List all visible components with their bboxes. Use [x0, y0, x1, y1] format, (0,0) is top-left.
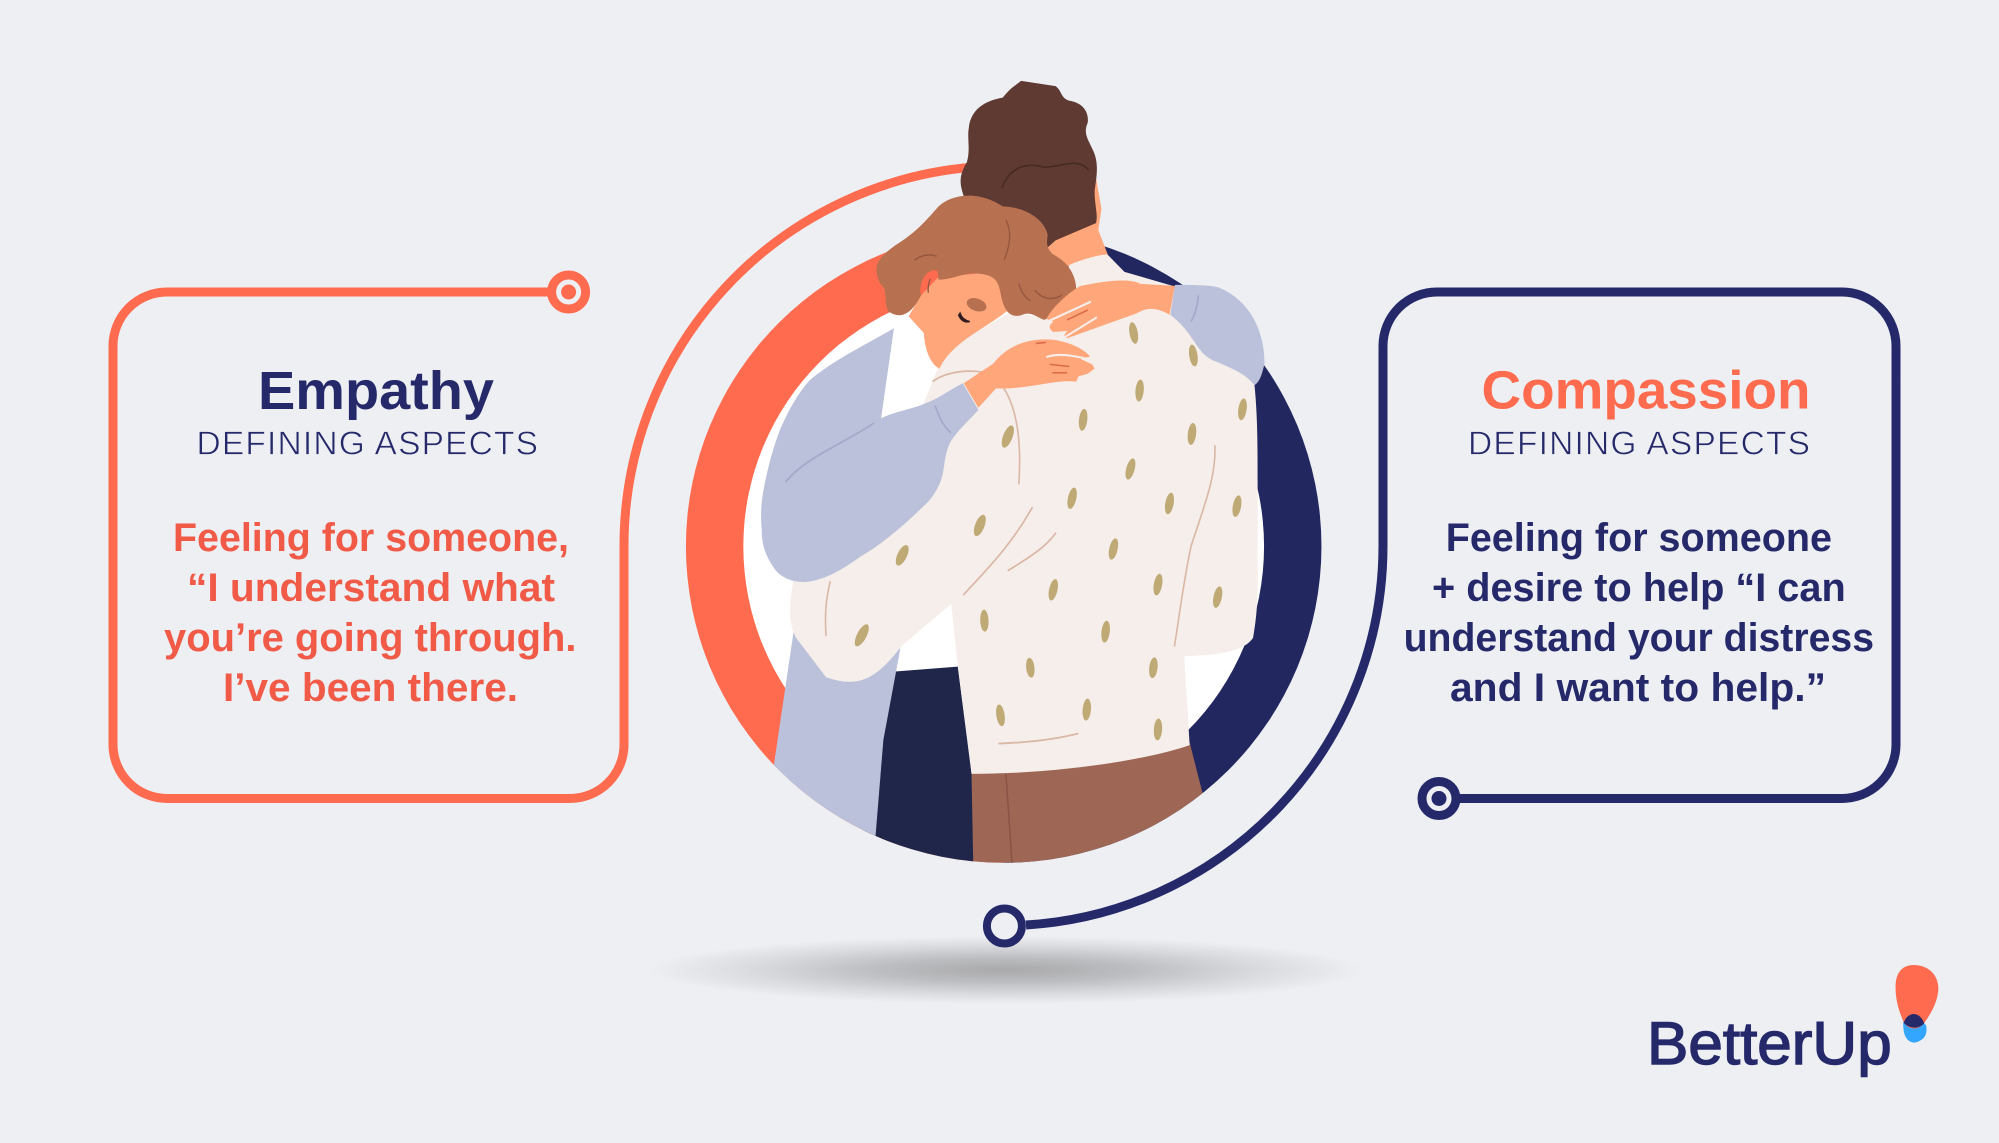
heading: empathy: Empathy: [258, 361, 494, 421]
panel: empathy outline with connector arc: [113, 167, 975, 798]
subheading: compassion: DEFINING ASPECTS: [1468, 426, 1810, 463]
text block: empathy definition: [164, 516, 576, 710]
icon: coral node: [552, 275, 586, 309]
ring: navy half: [1004, 230, 1321, 863]
icon: navy arc end ring: [987, 908, 1022, 944]
back figure: neck: [1040, 170, 1108, 267]
logo: BetterUp: [1647, 965, 1938, 1077]
woman: right sleeve on man's shoulder: [1170, 285, 1265, 385]
icon: logo droplets: [1896, 965, 1938, 1043]
text block: empathy definition: I’ve been there.: [223, 666, 518, 710]
woman: shirt patch: [881, 322, 941, 421]
text block: empathy definition: you’re going through.: [164, 616, 576, 660]
text block: empathy definition: “I understand what: [187, 566, 555, 610]
icon: navy node: [1422, 782, 1456, 816]
text block: compassion definition: + desire to help “I can: [1432, 566, 1846, 610]
ring interior: [743, 286, 1264, 807]
woman: coat sleeve: [761, 328, 978, 582]
woman: pants: [863, 666, 974, 862]
back figure: hair: [961, 81, 1097, 259]
text block: compassion definition: and I want to help.”: [1450, 666, 1826, 710]
woman: hair: [876, 196, 1076, 320]
subheading: empathy: DEFINING ASPECTS: [196, 426, 538, 463]
sweater dots: [852, 321, 1248, 741]
ground shadow: [648, 936, 1364, 1004]
heading: compassion: Compassion: [1482, 361, 1810, 421]
ring: coral half: [686, 230, 1004, 863]
woman: upper hand: [1046, 281, 1175, 338]
woman: face: [909, 272, 1007, 369]
text block: compassion definition: [1404, 516, 1874, 710]
panel: compassion outline with connector arc: [987, 292, 1896, 944]
man: pants: [774, 632, 1202, 863]
logo: BetterUp: BetterUp: [1647, 1010, 1892, 1077]
illustration: embracing couple in ring: [686, 81, 1321, 897]
man: sweater: [790, 255, 1258, 774]
woman: lower hand: [964, 339, 1095, 408]
text block: empathy definition: Feeling for someone,: [173, 516, 569, 560]
text block: compassion definition: understand your distress: [1404, 616, 1874, 660]
woman: coat lower panel: [774, 632, 900, 836]
text block: compassion definition: Feeling for someone: [1446, 516, 1832, 560]
